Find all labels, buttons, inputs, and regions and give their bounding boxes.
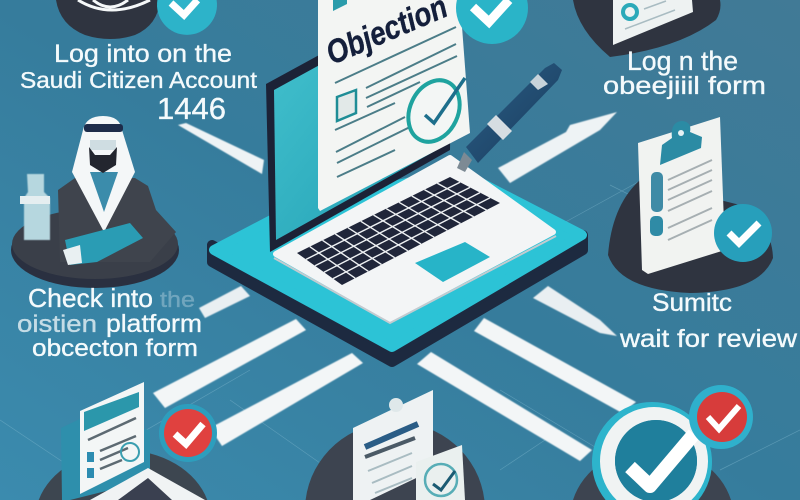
heading: step three: the — [160, 287, 195, 312]
check ring — [399, 72, 469, 150]
teal banner — [333, 0, 347, 11]
laptop screen bezel — [266, 0, 452, 252]
check badge — [157, 0, 217, 35]
heading: step two: obeejiiil form — [603, 72, 766, 100]
laptop lid — [61, 418, 150, 500]
top right step icon: document — [573, 0, 720, 57]
shield card — [416, 445, 465, 500]
heading: step two — [603, 46, 766, 100]
form banner — [84, 392, 139, 431]
check ring — [425, 464, 457, 496]
heading: step one — [20, 40, 258, 126]
document — [613, 0, 693, 45]
platform shadow — [212, 235, 583, 362]
clipboard step icon — [608, 117, 773, 293]
pedestal — [56, 0, 160, 39]
beard — [89, 147, 117, 173]
heading: step three — [17, 283, 202, 362]
heading: step one: 1446 — [157, 91, 226, 126]
form rows — [668, 160, 712, 240]
pen — [457, 63, 562, 172]
trackpad — [415, 242, 490, 282]
red check badge — [689, 385, 753, 449]
keffiyeh — [72, 116, 135, 232]
bar: upper left — [178, 123, 264, 174]
heading: step two: Log n the — [627, 46, 738, 76]
text lines — [625, 1, 675, 29]
document lines — [335, 27, 457, 177]
objection document — [318, 0, 470, 211]
heading: step one: Saudi Citizen Account — [20, 67, 258, 93]
central laptop — [212, 0, 583, 362]
globe — [78, 0, 150, 10]
large check — [630, 434, 694, 486]
platform — [214, 172, 582, 347]
laptop screen — [274, 0, 455, 240]
heading: step four: wait for review — [619, 325, 798, 353]
connector bars — [153, 112, 636, 461]
bottle — [24, 174, 50, 240]
heading: step four: Sumitc — [652, 289, 732, 317]
bar: lower left two — [210, 353, 363, 446]
bar: lower right two — [417, 352, 592, 461]
heading: step three: Check into — [28, 283, 153, 313]
red check badge — [159, 404, 217, 462]
bar: upper right — [498, 112, 617, 183]
bar: mid left — [199, 286, 250, 318]
pedestal — [306, 422, 484, 500]
heading: step three: oistien — [17, 311, 97, 338]
thumbnails — [651, 172, 663, 212]
form rows — [88, 418, 136, 469]
pedestal — [573, 0, 720, 57]
person step icon — [11, 116, 179, 288]
keyboard — [297, 177, 500, 285]
laptop base — [276, 158, 553, 319]
top check badge — [456, 0, 528, 44]
document — [353, 390, 433, 500]
agal band — [84, 124, 123, 132]
form sheet — [80, 382, 144, 494]
clip — [660, 121, 702, 165]
checkbox — [337, 90, 356, 121]
pedestal — [573, 447, 731, 500]
heading: step four — [619, 289, 798, 353]
heading: step three: obcecton form — [32, 335, 198, 362]
folder — [65, 223, 143, 265]
bottom right step icon — [573, 385, 753, 500]
clipboard sheet — [638, 117, 725, 274]
bar: lower left one — [153, 319, 306, 408]
large ring — [592, 402, 712, 500]
face and collar — [90, 140, 116, 150]
bottom left step icon — [39, 382, 217, 500]
heading: step one: Log into on the — [54, 40, 232, 68]
robe — [58, 178, 176, 262]
top left step icon: globe — [56, 0, 217, 39]
pedestal — [39, 450, 207, 500]
pedestal — [608, 180, 773, 293]
pedestal — [11, 212, 179, 288]
document title — [365, 424, 418, 447]
bottom centre step icon — [306, 390, 484, 500]
check badge — [714, 204, 772, 262]
heading: step three: platform — [106, 310, 202, 338]
bar: lower right one — [474, 318, 636, 413]
ring icon — [623, 5, 637, 19]
bar: mid right — [533, 286, 617, 336]
keyboard — [90, 468, 205, 500]
